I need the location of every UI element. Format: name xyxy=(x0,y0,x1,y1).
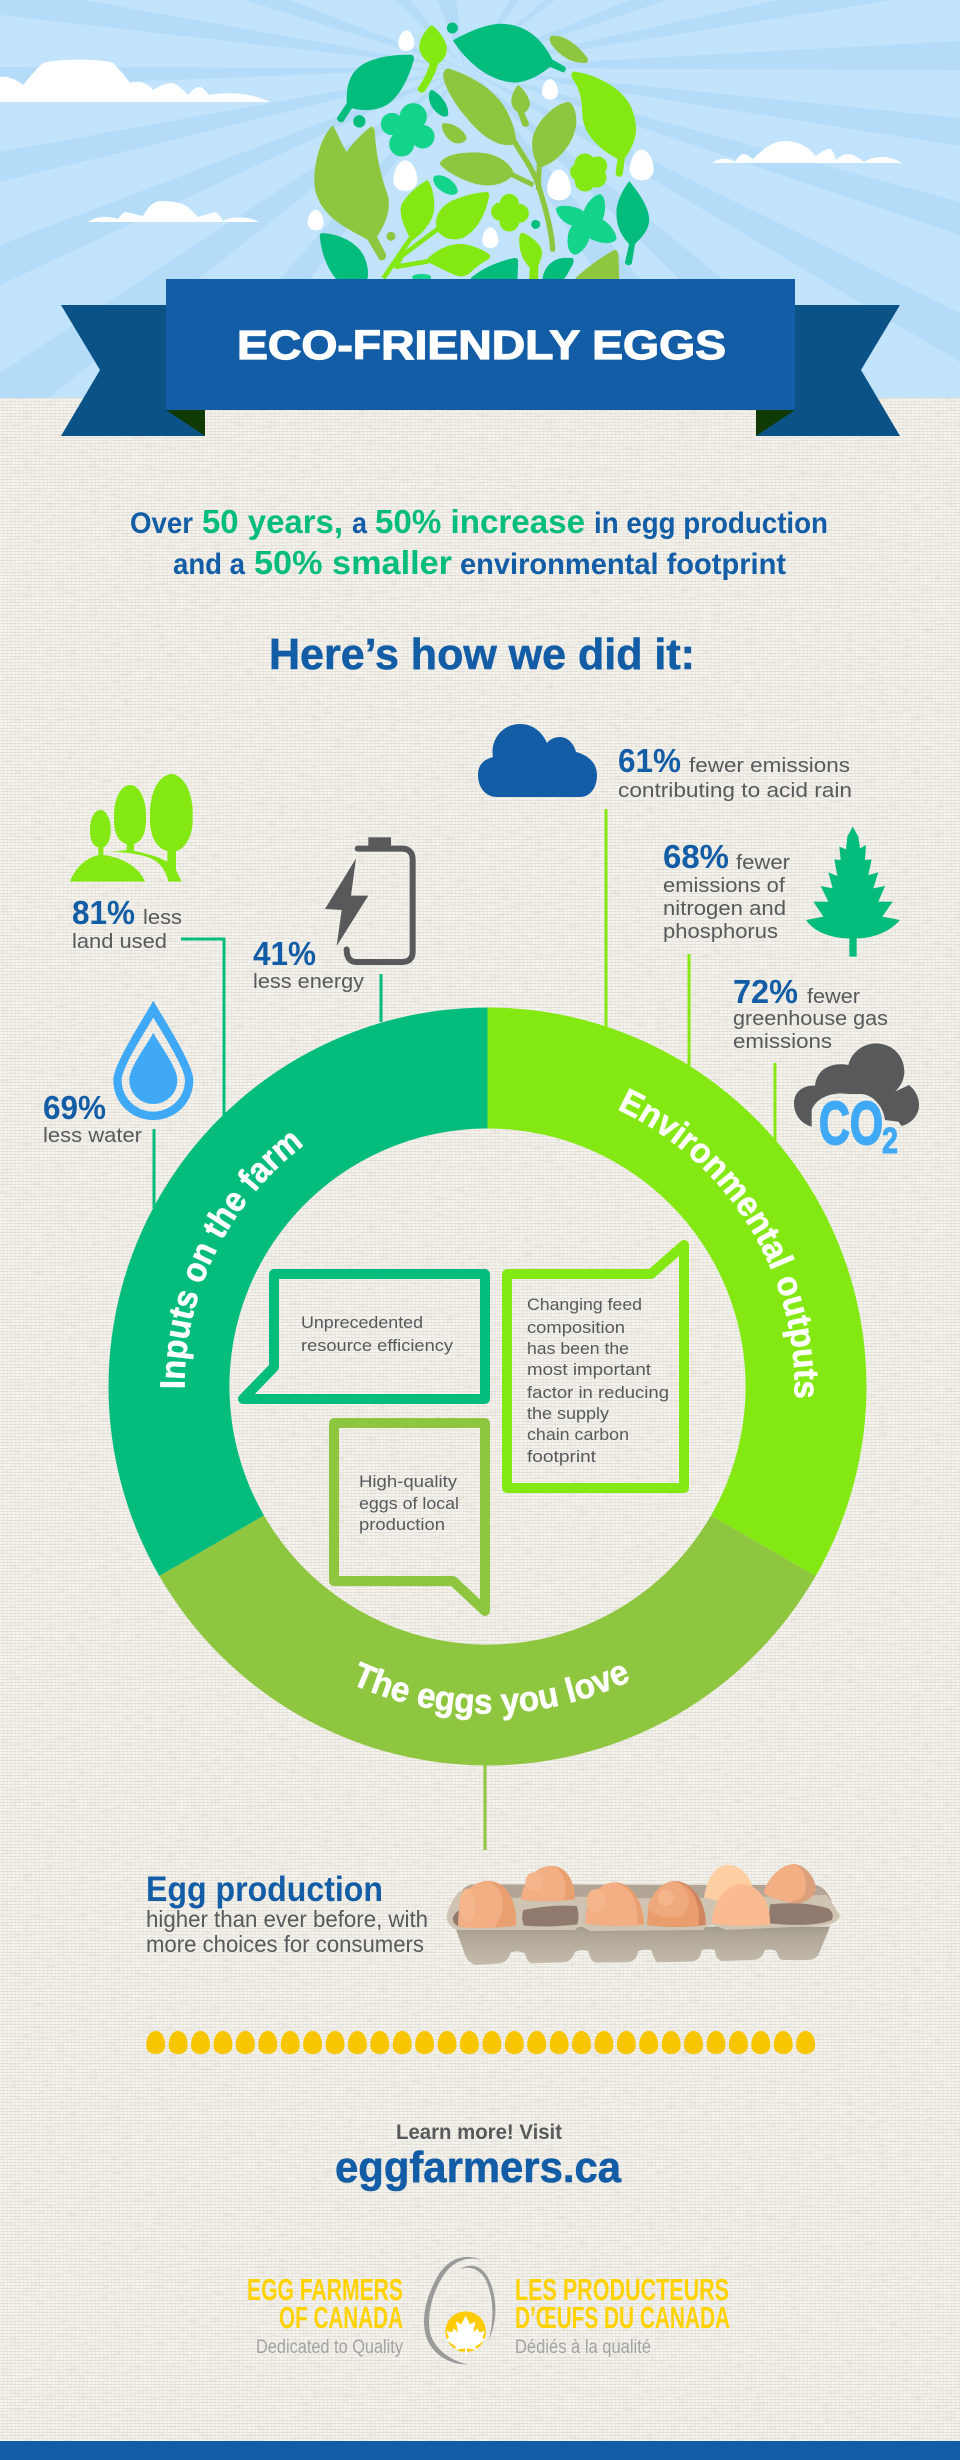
stat: 72%: fewer xyxy=(807,985,860,1008)
stat: 81%: land used xyxy=(72,930,167,953)
stat: 68%: nitrogen and xyxy=(663,897,786,920)
subtitle: 50% smaller xyxy=(254,544,452,581)
speech bubble: feed composition xyxy=(507,1245,684,1488)
egg production text: higher than ever before, with xyxy=(146,1906,428,1932)
subtitle: Over xyxy=(130,507,193,540)
stat: 68%: fewer xyxy=(736,851,790,874)
ring label: inputs on the farm: Inputs on the farm xyxy=(160,1133,304,1388)
stat: 69% xyxy=(43,1089,142,1147)
logo: egg emblem xyxy=(424,2257,495,2364)
call to action xyxy=(335,2121,621,2192)
carton base xyxy=(455,1927,830,1965)
connector lines xyxy=(154,809,775,1850)
logo: french wordmark: D’ŒUFS DU CANADA xyxy=(515,2300,730,2335)
logo: english wordmark: Dedicated to Quality xyxy=(256,2337,403,2358)
speech bubble: resource efficiency: Unprecedented xyxy=(301,1313,423,1332)
egg production text: Egg production xyxy=(146,1870,383,1909)
ring segment: inputs on the farm xyxy=(109,1008,488,1576)
sky with sun rays xyxy=(0,0,960,398)
ring segment: the eggs you love xyxy=(159,1516,816,1765)
stat: 41%: 41% xyxy=(253,935,316,972)
stat: 72%: emissions xyxy=(733,1030,832,1053)
ribbon tails xyxy=(61,305,900,436)
egg production text: more choices for consumers xyxy=(146,1931,424,1957)
icon: CO2 cloud: 2 xyxy=(882,1120,898,1161)
stat: 69%: 69% xyxy=(43,1089,106,1126)
stat: 68%: emissions of xyxy=(663,874,785,897)
stat: 68% xyxy=(663,838,790,943)
logo: english wordmark: OF CANADA xyxy=(279,2300,403,2335)
icon: egg carton xyxy=(447,1864,840,1965)
stat: 61%: fewer emissions xyxy=(689,754,850,777)
speech bubble: local production xyxy=(334,1423,485,1611)
speech bubble: feed composition: most important xyxy=(527,1360,651,1379)
icon: evergreen tree xyxy=(806,827,900,957)
subtitle: 50 years, xyxy=(202,503,343,540)
subtitle: and a xyxy=(173,548,245,581)
speech bubble: resource efficiency: resource efficiency xyxy=(301,1336,454,1355)
row of yellow eggs xyxy=(146,2031,815,2054)
carton rim xyxy=(447,1890,840,1931)
icon: trees on hill xyxy=(70,774,193,882)
ring label: the eggs you love: The eggs you love xyxy=(357,1661,629,1720)
subtitle: in egg production xyxy=(594,507,828,540)
cloud: right xyxy=(712,141,902,163)
icon: water drop xyxy=(113,1001,193,1120)
stat: 68%: phosphorus xyxy=(663,920,778,943)
subtitle: 50% increase xyxy=(375,503,585,540)
footer bar xyxy=(0,2441,960,2460)
ribbon main panel xyxy=(166,279,795,410)
icon: CO2 cloud xyxy=(794,1043,919,1161)
speech bubble: feed composition: composition xyxy=(527,1318,625,1337)
olive leaves xyxy=(315,36,618,278)
speech bubble: feed composition: the supply xyxy=(527,1404,610,1423)
icon: blue cloud xyxy=(478,724,597,797)
subtitle: a xyxy=(352,507,367,540)
stat: 72%: greenhouse gas xyxy=(733,1007,888,1030)
ring label: environmental outputs: Environmental outputs xyxy=(618,1088,818,1398)
egg production text xyxy=(146,1870,428,1957)
stat: 69%: less water xyxy=(43,1124,142,1147)
speech bubble: local production: High-quality xyxy=(359,1472,458,1491)
speech bubble: feed composition: chain carbon xyxy=(527,1425,629,1444)
dark green leaves xyxy=(321,23,648,278)
icon: egg made of leaves xyxy=(308,23,654,280)
heading: Here’s how we did it: xyxy=(269,630,695,679)
stat: 68%: 68% xyxy=(663,838,729,875)
stat: 61%: 61% xyxy=(618,742,681,779)
cloud: lower left xyxy=(88,201,259,222)
logo: french wordmark: Dédiés à la qualité xyxy=(515,2337,651,2358)
speech bubble: feed composition: factor in reducing xyxy=(527,1383,669,1402)
speech bubble: resource efficiency xyxy=(243,1274,485,1399)
title ribbon xyxy=(61,279,900,436)
stat: 81%: 81% xyxy=(72,894,135,931)
logo: english wordmark xyxy=(247,2272,403,2358)
ribbon folds xyxy=(166,410,795,436)
stat: 81% xyxy=(72,894,182,953)
stat: 61% xyxy=(618,742,852,802)
stat: 72% xyxy=(733,973,888,1053)
call to action: eggfarmers.ca xyxy=(335,2143,621,2192)
subtitle: environmental footprint xyxy=(460,548,786,581)
stat: 72%: 72% xyxy=(733,973,798,1010)
logo: french wordmark: LES PRODUCTEURS xyxy=(515,2272,729,2307)
stat: 41%: less energy xyxy=(253,970,365,993)
speech bubble: local production: production xyxy=(359,1515,445,1534)
subtitle xyxy=(130,503,828,581)
icon: CO2 cloud: CO xyxy=(819,1090,883,1157)
logo: french wordmark xyxy=(515,2272,730,2358)
carton back xyxy=(460,1884,832,1912)
speech bubble: feed composition: Changing feed xyxy=(527,1295,642,1314)
stat: 61%: contributing to acid rain xyxy=(618,779,852,802)
icon: battery with lightning bolt xyxy=(325,837,413,962)
logo: english wordmark: EGG FARMERS xyxy=(247,2272,403,2307)
white eggs among the leaves xyxy=(308,30,654,248)
lime leaves xyxy=(383,26,635,278)
stat: 81%: less xyxy=(143,906,182,929)
speech bubble: feed composition: has been the xyxy=(527,1339,629,1358)
speech bubble: local production: eggs of local xyxy=(359,1494,459,1513)
call to action: Learn more! Visit xyxy=(396,2121,562,2144)
carton cups xyxy=(453,1903,833,1927)
teal flowers xyxy=(382,104,616,280)
speech bubble: feed composition: footprint xyxy=(527,1447,596,1466)
ring diagram xyxy=(108,1008,866,1766)
eggs in the carton xyxy=(521,1866,575,1901)
stat: 41% xyxy=(253,935,365,993)
cloud: upper left xyxy=(0,60,270,102)
title: ECO-FRIENDLY EGGS xyxy=(237,322,726,368)
ring segment: environmental outputs xyxy=(488,1008,866,1576)
